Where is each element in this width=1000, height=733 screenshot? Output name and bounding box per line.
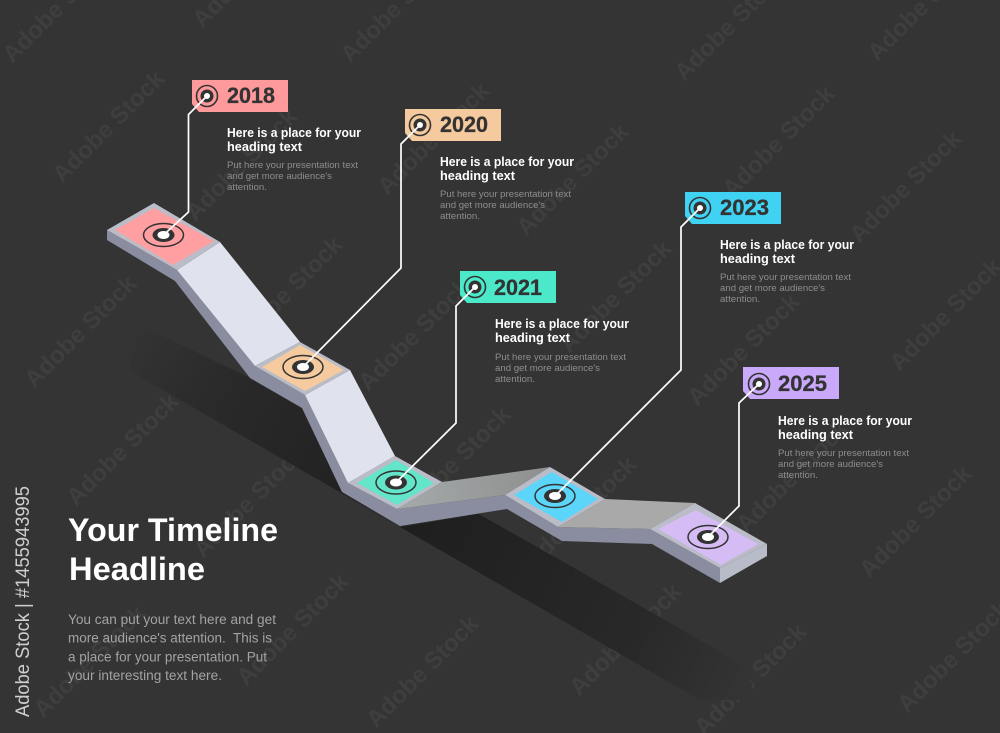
callout 2018: Here is a place for your [227, 126, 361, 140]
callout 2025: 2025 [778, 371, 827, 396]
intro paragraph [68, 612, 276, 683]
ramp 2021 to 2023 [397, 467, 550, 509]
intro paragraph: your interesting text here. [68, 668, 222, 683]
callout 2023: 2023 [720, 195, 769, 220]
isometric path [107, 203, 767, 583]
stock watermarks: Adobe Stock [519, 451, 643, 574]
step 2023 [505, 467, 605, 527]
callout 2018: heading text [227, 140, 303, 154]
callout 2020: attention. [440, 211, 480, 222]
ramp 2023 to 2025 [558, 499, 695, 529]
ramp 2020 to 2021 [305, 370, 395, 483]
stock id side label: Adobe Stock | #1455943995 [13, 486, 34, 717]
stock watermarks: Adobe Stock [731, 415, 855, 538]
callout 2018: and get more audience's [227, 171, 332, 182]
callout 2018: 2018 [227, 83, 275, 108]
callout 2018: Put here your presentation text [227, 160, 358, 171]
callout 2020: and get more audience's [440, 200, 545, 211]
stock watermarks: Adobe Stock [225, 231, 349, 354]
callout 2025: and get more audience's [778, 459, 883, 470]
callout 2023 [555, 192, 854, 496]
callout 2021: heading text [495, 331, 571, 345]
callout 2023: heading text [720, 252, 796, 266]
callout 2025: heading text [778, 428, 854, 442]
callout 2021 [396, 271, 629, 482]
callout 2018: attention. [227, 182, 267, 193]
callout 2025: Put here your presentation text [778, 448, 909, 459]
main headline: Your Timeline [68, 512, 278, 548]
callout 2021: 2021 [494, 275, 542, 300]
end block right face [720, 544, 767, 583]
callout 2020 [303, 109, 574, 367]
callout 2025 [708, 367, 912, 537]
stock watermarks: Adobe Stock [19, 270, 143, 393]
stock watermarks: Adobe Stock [854, 460, 978, 583]
step 2021 [348, 456, 442, 509]
stock watermarks: Adobe Stock [393, 401, 517, 524]
path side faces [107, 230, 720, 583]
callout 2020: heading text [440, 169, 516, 183]
stock watermarks: Adobe Stock [682, 288, 806, 411]
callout 2025: Here is a place for your [778, 414, 912, 428]
callout 2023: attention. [720, 294, 760, 305]
callout 2021: and get more audience's [495, 363, 600, 374]
stock watermarks: Adobe Stock [61, 388, 185, 511]
step 2025 [650, 503, 767, 568]
callout 2021: Here is a place for your [495, 317, 629, 331]
stock watermarks: Adobe Stock [47, 65, 171, 188]
ramp 2018 to 2020 [177, 242, 300, 366]
intro paragraph: more audience's attention. This is [68, 631, 272, 646]
main headline [68, 512, 278, 587]
callout 2023: and get more audience's [720, 283, 825, 294]
stock watermarks: Adobe Stock [554, 235, 678, 358]
step 2020 [255, 342, 350, 395]
main headline: Headline [69, 551, 205, 587]
stock watermarks: Adobe Stock [372, 77, 496, 200]
cast shadow [125, 330, 755, 700]
stock watermarks: Adobe Stock [511, 118, 635, 241]
stock watermarks: Adobe Stock [180, 103, 304, 226]
callout 2023: Here is a place for your [720, 238, 854, 252]
stock watermarks: Adobe Stock [361, 610, 485, 733]
callout 2025: attention. [778, 470, 818, 481]
callout 2020: 2020 [440, 112, 488, 137]
intro paragraph: You can put your text here and get [68, 612, 276, 627]
callout 2021: attention. [495, 374, 535, 385]
stock watermarks: Adobe Stock [564, 578, 688, 701]
stock watermarks: Adobe Stock [188, 440, 312, 563]
stock watermarks: Adobe Stock [717, 80, 841, 203]
callout 2021: Put here your presentation text [495, 352, 626, 363]
stock watermarks: Adobe Stock [28, 600, 152, 723]
callout 2023: Put here your presentation text [720, 272, 851, 283]
callout 2020: Put here your presentation text [440, 189, 571, 200]
stock watermarks: Adobe Stock [844, 125, 968, 248]
stock watermarks: Adobe Stock [231, 568, 355, 691]
stock watermarks: Adobe Stock [353, 273, 477, 396]
intro paragraph: a place for your presentation. Put [68, 649, 267, 664]
callout 2018 [164, 80, 361, 235]
step 2018 [107, 203, 220, 270]
callout 2020: Here is a place for your [440, 155, 574, 169]
